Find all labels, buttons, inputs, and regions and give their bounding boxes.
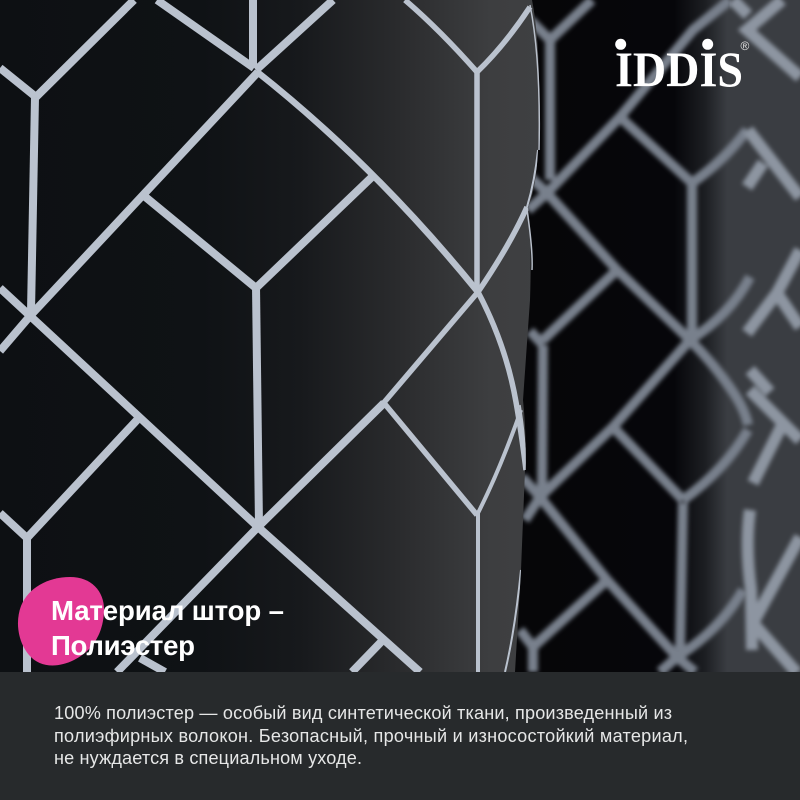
right-side curved lines (256, 0, 538, 672)
blurred lattice pattern (520, 0, 750, 672)
logo: iDDiS: IDDIS (615, 41, 743, 97)
curtain edge thin lines (520, 5, 539, 470)
description panel (0, 672, 800, 800)
description text (54, 703, 688, 768)
logo: iDDiS: ® (740, 39, 750, 53)
pink blob accent (18, 577, 104, 665)
description text: полиэфирных волокон. Безопасный, прочный и износостойкий материал, (54, 726, 688, 746)
upper-left hexagon (0, 0, 333, 527)
heading (51, 595, 284, 661)
central hexagon (0, 176, 373, 672)
heading: Полиэстер (51, 630, 195, 661)
description text: 100% полиэстер — особый вид синтетической ткани, произведенный из (54, 703, 672, 723)
heading: Материал штор – (51, 595, 284, 626)
blurred lattice on far fold (733, 0, 800, 673)
description text: не нуждается в специальном уходе. (54, 748, 362, 768)
lower lattice lines (117, 403, 420, 672)
geometric lattice pattern (0, 0, 538, 672)
photo: foreground curtain (0, 0, 545, 672)
